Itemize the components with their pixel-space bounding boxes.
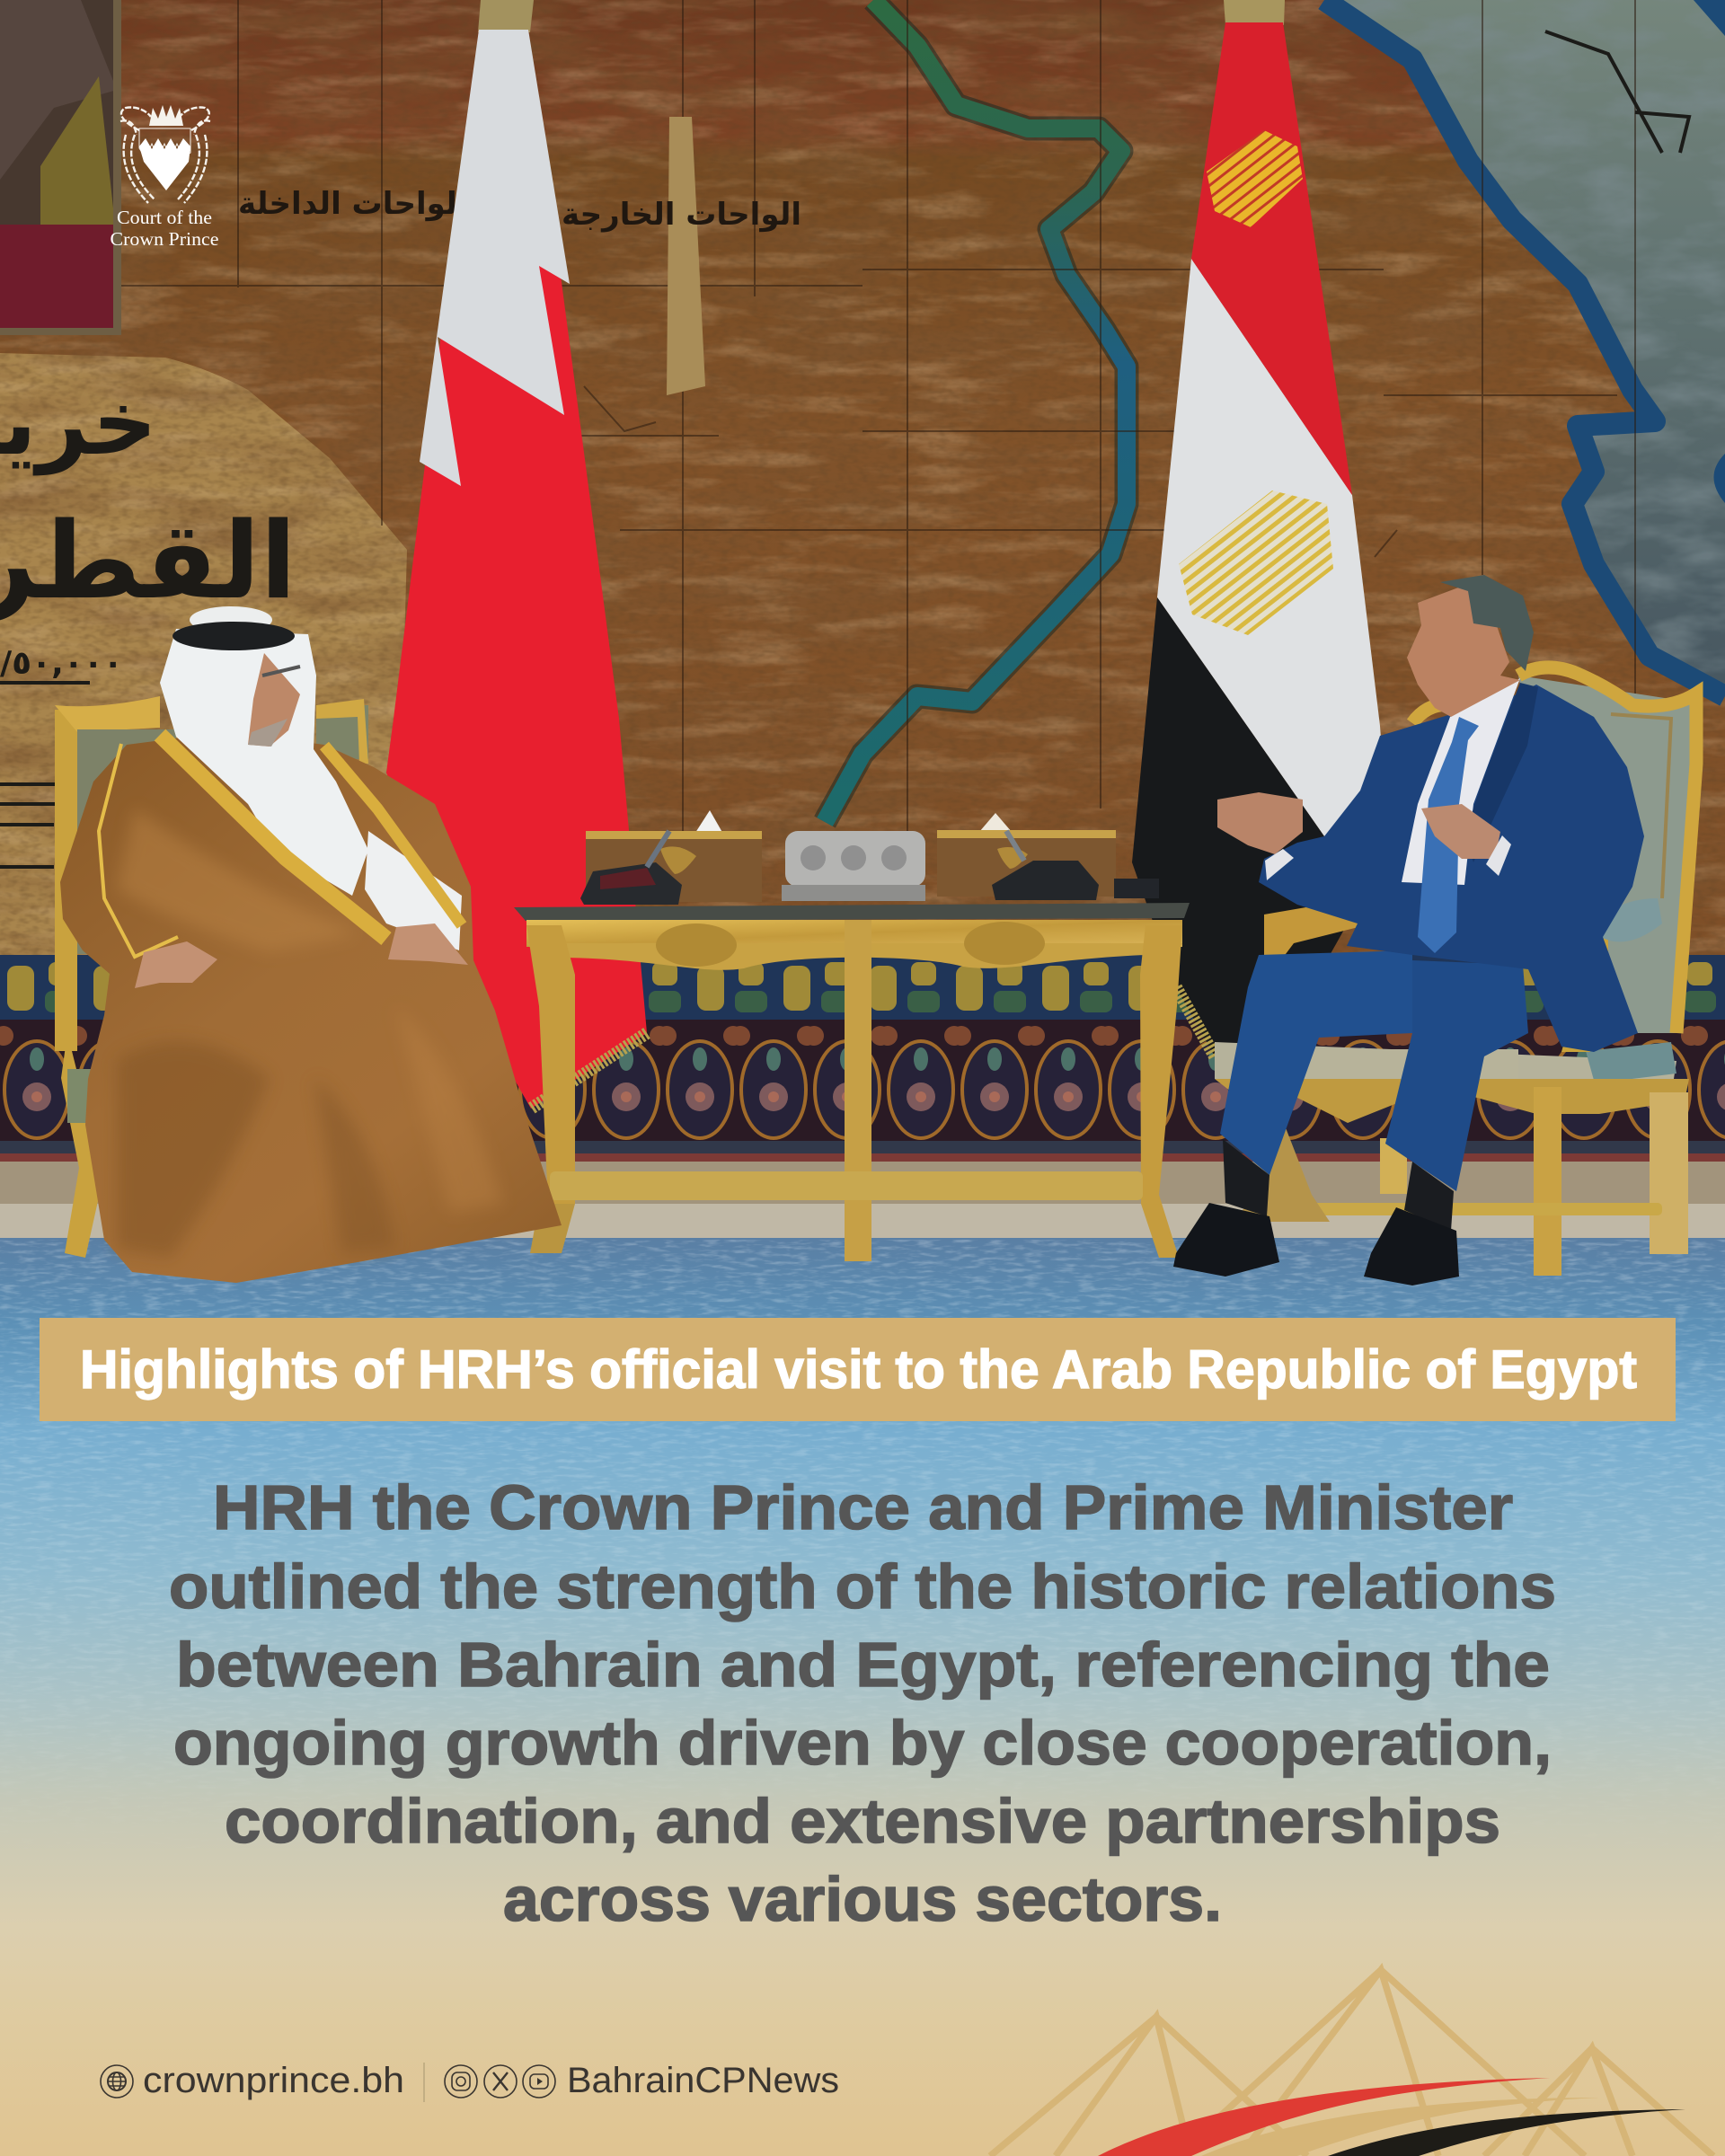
- background: tapestry map wall: /٥٠,٠٠٠: [0, 645, 123, 682]
- body text block: across various sectors.: [503, 1864, 1222, 1934]
- background: tapestry map wall: [0, 0, 1725, 961]
- icon: globe: [101, 2065, 133, 2098]
- body text block: [169, 1472, 1556, 1934]
- footer: website and social handles: [101, 2061, 839, 2102]
- background: tapestry map wall: الواحات الخارجة: [562, 197, 801, 233]
- icon: youtube: [523, 2065, 555, 2098]
- icon: instagram: [445, 2065, 477, 2098]
- body text block: coordination, and extensive partnerships: [225, 1786, 1500, 1856]
- socks: [1223, 1139, 1269, 1216]
- emblem in red stripe: [1207, 130, 1303, 227]
- flag: Egypt: [1132, 0, 1388, 1056]
- body text block: outlined the strength of the historic relations: [169, 1551, 1556, 1621]
- logo text: [110, 207, 219, 250]
- hands: [135, 941, 217, 988]
- tie: [1418, 717, 1479, 953]
- gold trim: [160, 735, 386, 939]
- shirt: [1402, 678, 1520, 885]
- website text: crownprince.bh: [143, 2061, 404, 2100]
- white thobe and headdress: [160, 629, 368, 896]
- head: [1407, 584, 1520, 717]
- hands: [1217, 792, 1511, 880]
- banner: heading: [40, 1318, 1676, 1421]
- table with boxes and microphones: [514, 810, 1190, 1261]
- icon: X: [484, 2065, 517, 2098]
- bottom gradient panel with water texture: [0, 1238, 1725, 2037]
- tissue box right: [937, 813, 1116, 897]
- swoosh: tan: [1201, 2098, 1600, 2156]
- logo text: Crown Prince: [110, 228, 219, 250]
- logo text: Court of the: [117, 207, 212, 228]
- face: [248, 653, 300, 747]
- logo: Court of the Crown Prince: [110, 105, 219, 250]
- robe shading folds: [117, 808, 503, 1258]
- tissue box left: [586, 810, 762, 902]
- trousers: [1220, 950, 1412, 1175]
- gold apron and legs: [526, 920, 1182, 1261]
- swoosh: red: [1098, 2078, 1550, 2156]
- handle text: BahrainCPNews: [567, 2061, 839, 2100]
- body text block: HRH the Crown Prince and Prime Minister: [213, 1472, 1513, 1542]
- body text block: between Bahrain and Egypt, referencing the: [176, 1630, 1550, 1700]
- emblem in white stripe: [1179, 490, 1333, 635]
- background: tapestry map wall: الواحات الداخلة: [238, 186, 467, 222]
- silver box: [782, 831, 925, 901]
- body text block: ongoing growth driven by close cooperation,: [173, 1708, 1552, 1778]
- agal: [190, 606, 272, 633]
- footer: pyramids and swooshes: [990, 1970, 1713, 2156]
- person: Crown Prince seated in robe: [60, 606, 562, 1283]
- person: right, chair: [1215, 667, 1696, 1276]
- person: left, chair: [55, 696, 368, 1258]
- background: persian rug band: [0, 955, 1725, 1241]
- flag: Bahrain: [386, 0, 647, 1109]
- microphones: [580, 831, 1159, 905]
- tabletop: [514, 903, 1190, 921]
- lapel: [1464, 683, 1538, 862]
- robe: [60, 732, 562, 1283]
- swoosh: black: [1328, 2109, 1685, 2156]
- shoes: [1173, 1203, 1279, 1277]
- banner: heading: Highlights of HRH’s official visit to the Arab Republic of Egypt: [80, 1339, 1637, 1400]
- jacket: [1259, 685, 1644, 1052]
- person: President seated in blue suit: [1173, 575, 1644, 1286]
- coat of arms: [120, 105, 210, 203]
